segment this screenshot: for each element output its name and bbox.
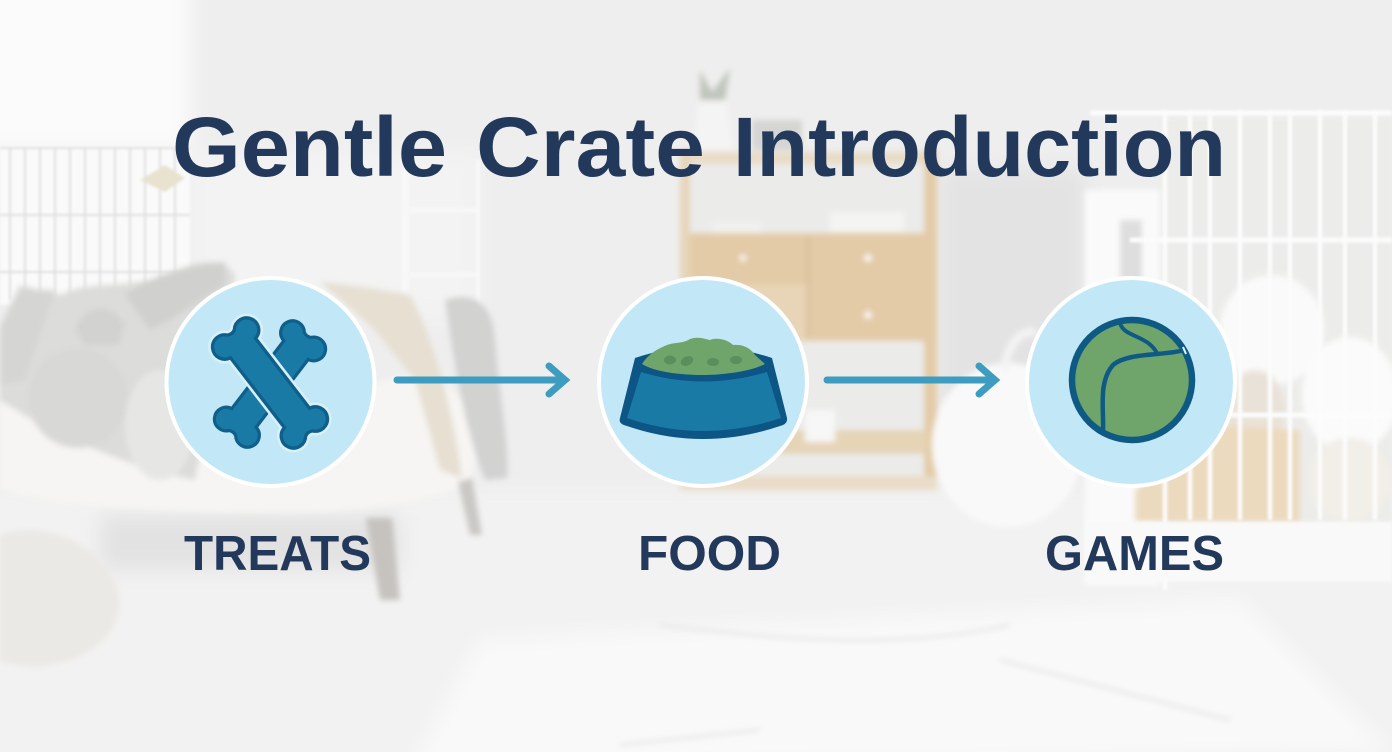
grey knit blanket (0, 262, 235, 480)
label: games: GAMES (1045, 527, 1224, 581)
white exercise ball (932, 363, 1084, 527)
beige blanket (320, 282, 462, 478)
step 2: food (599, 278, 807, 486)
vase and plant (700, 68, 730, 100)
step 1: treats (166, 278, 374, 486)
sofa seat (0, 370, 476, 513)
sofa legs (366, 518, 400, 600)
icon: bowl of food (620, 338, 787, 439)
arrow: treats to food (397, 366, 565, 394)
games circle (1027, 278, 1235, 486)
icon: crossed bones (208, 313, 332, 453)
left crib rails (0, 145, 190, 305)
title (172, 100, 1226, 194)
food circle (599, 278, 807, 486)
label: treats: TREATS (184, 527, 371, 581)
label: food: FOOD (638, 527, 781, 581)
shelf (684, 150, 934, 490)
title: Crate (476, 100, 705, 194)
icon: tennis ball (1072, 320, 1192, 440)
right crib panel (1085, 190, 1160, 585)
arrow: food to games (827, 366, 995, 394)
title: Introduction (733, 100, 1226, 194)
beige box (1135, 425, 1300, 522)
rug cracks (620, 625, 1230, 745)
crib bars (1090, 110, 1392, 590)
treats circle (166, 278, 374, 486)
teddy bear (1220, 275, 1324, 385)
step 3: games (1027, 278, 1235, 486)
pouf (0, 530, 120, 667)
grey draped blanket (445, 297, 508, 480)
title: Gentle (172, 100, 447, 194)
